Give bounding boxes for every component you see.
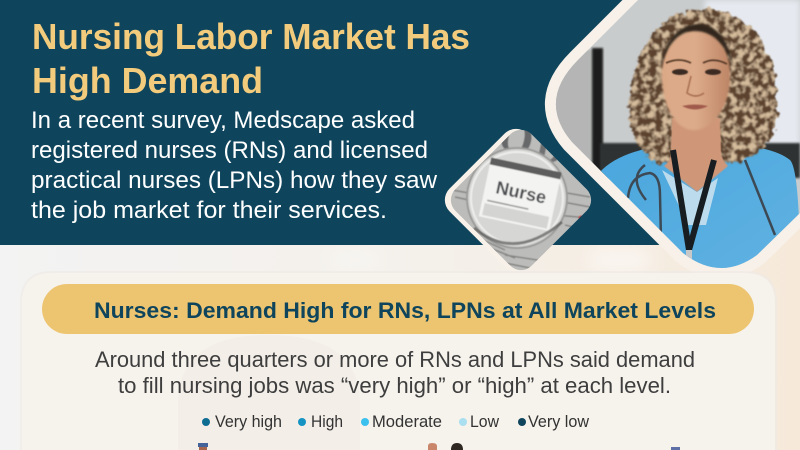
legend: High [311, 412, 343, 431]
legend [202, 412, 590, 431]
legend: Low [470, 412, 500, 431]
photo: nurse [540, 0, 800, 280]
intro text: In a recent survey, Medscape asked [31, 107, 415, 134]
title: High Demand [32, 60, 263, 101]
faint background figure [178, 335, 360, 450]
eyes and brows [666, 60, 727, 110]
title: Nursing Labor Market Has [32, 16, 470, 57]
legend: Moderate [372, 412, 442, 431]
intro text: registered nurses (RNs) and licensed [31, 137, 428, 164]
panel: demand card [20, 271, 777, 450]
hair [628, 9, 778, 164]
stethoscope [628, 160, 775, 240]
magnified note: Nurse [494, 177, 548, 208]
face [662, 30, 730, 130]
intro text [31, 107, 438, 224]
description text: to fill nursing jobs was “very high” or “high” at each level. [118, 373, 671, 398]
section heading: Nurses: Demand High for RNs, LPNs at All Market Levels [94, 298, 716, 323]
undershirt [662, 170, 718, 225]
icon: nurse figure tops [198, 443, 680, 450]
neck [664, 118, 728, 192]
photo: newspaper with magnifier [444, 128, 592, 270]
header panel [0, 0, 680, 245]
newspaper headline letters: O [495, 111, 538, 166]
photo: newspaper with magnifier: D [532, 126, 568, 173]
lanyard [673, 150, 714, 250]
intro text: practical nurses (LPNs) how they saw [31, 167, 438, 194]
title [32, 16, 470, 101]
legend: Very low [528, 412, 590, 431]
intro text: the job market for their services. [31, 197, 387, 224]
description text: Around three quarters or more of RNs and LPNs said demand [95, 347, 695, 372]
description text [95, 347, 695, 398]
legend: Very high [215, 412, 282, 431]
scrubs [601, 148, 799, 268]
magnified note [479, 158, 562, 231]
section heading [42, 284, 754, 334]
